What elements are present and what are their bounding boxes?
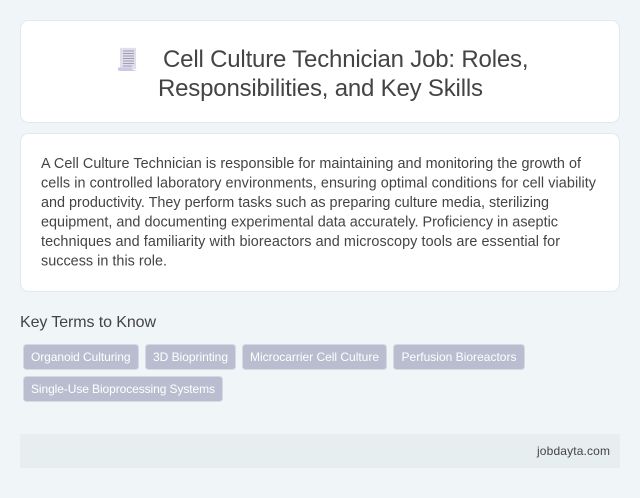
icon: document scroll [118, 48, 136, 71]
title [158, 46, 528, 102]
tag: perfusion bioreactors [394, 344, 524, 370]
text block: description: equipment, and documenting experimental data accurately. Proficiency in aseptic [41, 214, 558, 230]
text block: description: success in this role. [41, 254, 167, 270]
text block: description: A Cell Culture Technician is responsible for maintaining and monitoring the growth of [41, 156, 582, 172]
title: Cell Culture Technician Job: Roles, [163, 46, 528, 73]
tag: perfusion bioreactors: Perfusion Bioreactors [402, 350, 516, 364]
heading: key terms: Key Terms to Know [20, 314, 156, 331]
tag: 3d bioprinting: 3D Bioprinting [153, 350, 228, 364]
tag: single-use bioprocessing systems: Single-Use Bioprocessing Systems [31, 382, 215, 396]
footer bar [20, 434, 620, 468]
tag: organoid culturing: Organoid Culturing [31, 350, 130, 364]
panel: description card [20, 134, 620, 292]
footer text: source: jobdayta.com [536, 444, 610, 458]
text block: description [41, 156, 597, 270]
tag: microcarrier cell culture [242, 344, 386, 370]
tag: 3d bioprinting [146, 344, 236, 370]
panel: title card [20, 20, 620, 122]
tag: organoid culturing [24, 344, 138, 370]
tag list [24, 344, 524, 402]
text block: description: techniques and familiarity with bioreactors and microscopy tools are essential for [41, 234, 560, 250]
title: Responsibilities, and Key Skills [158, 75, 483, 102]
text block: description: cells in controlled laboratory environments, ensuring optimal conditions for cell viability [41, 176, 597, 192]
text block: description: and productivity. They perform tasks such as preparing culture media, sterilizing [41, 195, 549, 211]
tag: single-use bioprocessing systems [24, 376, 222, 402]
tag: microcarrier cell culture: Microcarrier Cell Culture [250, 350, 379, 364]
